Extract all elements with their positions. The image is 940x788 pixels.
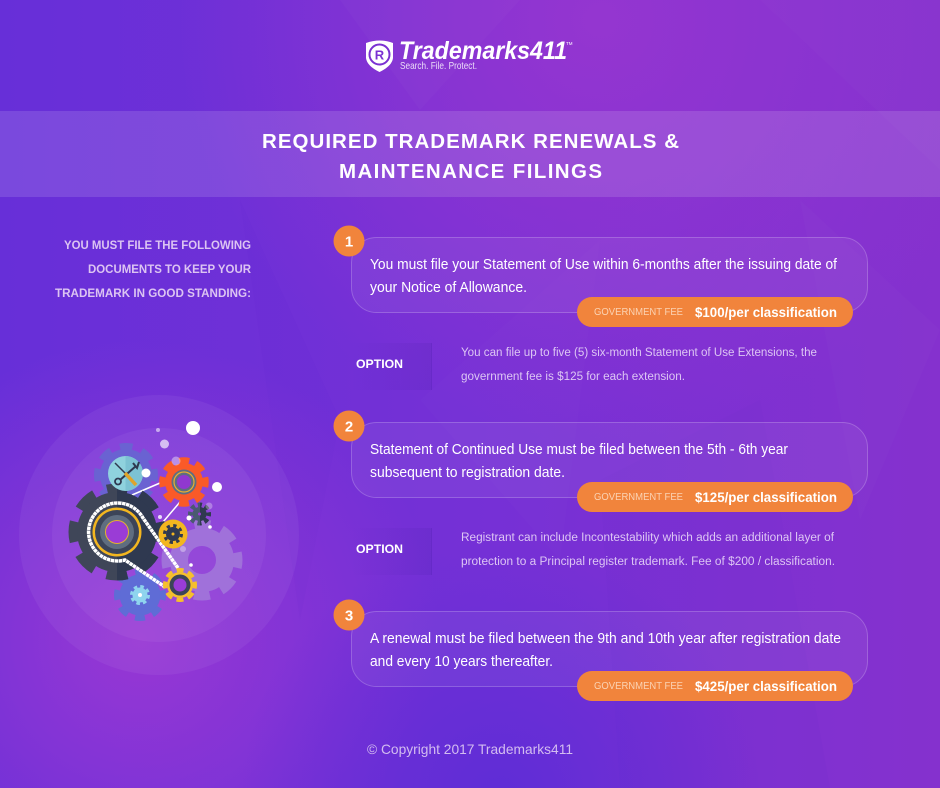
- logo wordmark: Trademarks411: [399, 37, 567, 65]
- step 3 text: [370, 631, 841, 670]
- icon: yellow dial: [158, 520, 188, 548]
- title: REQUIRED TRADEMARK RENEWALS &: [262, 130, 679, 153]
- option 2 text: Registrant can include Incontestability which adds an additional layer of: [461, 532, 835, 544]
- icon: orange gear: [162, 460, 206, 504]
- option 1 text: You can file up to five (5) six-month Statement of Use Extensions, the: [461, 347, 817, 359]
- step 3 text: A renewal must be filed between the 9th and 10th year after registration date: [370, 631, 841, 647]
- logo trademark sign: TM: [566, 41, 573, 46]
- step 3 fee pill: $425/per classification: [695, 678, 837, 694]
- step 3 fee pill: GOVERNMENT FEE: [594, 680, 683, 692]
- icon: blue gear top: [98, 446, 154, 504]
- icon: shield: R: [375, 48, 385, 62]
- intro text: DOCUMENTS TO KEEP YOUR: [88, 264, 252, 276]
- step 2 text: subsequent to registration date.: [370, 465, 565, 481]
- option 1 text: [461, 347, 817, 383]
- logo: [366, 37, 573, 72]
- option 2: [351, 528, 835, 575]
- icon: yellow gear: [165, 570, 195, 600]
- panel: step 1: [334, 226, 868, 327]
- icon: large dark gear: [73, 488, 161, 576]
- step 2 fee pill: [577, 482, 853, 512]
- step 1 text: You must file your Statement of Use within 6-months after the issuing date of: [370, 257, 838, 273]
- logo tagline: Search. File. Protect.: [400, 60, 477, 72]
- title: MAINTENANCE FILINGS: [339, 160, 602, 183]
- footer copyright: © Copyright 2017 Trademarks411: [367, 741, 573, 757]
- panel: step 2: [334, 410, 868, 512]
- step 3 badge: 3: [345, 608, 353, 624]
- step 2 fee pill: $125/per classification: [695, 489, 837, 505]
- step 2 text: [370, 442, 788, 481]
- step 1 fee pill: [577, 297, 853, 327]
- illustration: gears: [19, 395, 299, 675]
- step 1 text: [370, 257, 838, 296]
- connector lines: [132, 483, 180, 522]
- icon: blue gear bottom: [117, 572, 163, 618]
- step 2 badge: 2: [345, 418, 353, 436]
- icon: belt: [89, 503, 178, 587]
- icon: shield: [366, 40, 393, 72]
- step 1 badge: [334, 226, 364, 256]
- decorative dots: [142, 421, 222, 567]
- option 2 text: [461, 532, 835, 568]
- panel: step 3: [334, 600, 868, 701]
- title: [262, 130, 679, 183]
- intro text: YOU MUST FILE THE FOLLOWING: [64, 240, 251, 252]
- intro text: [55, 240, 252, 300]
- step 2 text: Statement of Continued Use must be filed between the 5th - 6th year: [370, 442, 788, 458]
- icon: pale purple gear: [166, 524, 238, 596]
- option 2 text: protection to a Principal register trademark. Fee of $200 / classification.: [461, 556, 835, 568]
- option 1 text: government fee is $125 for each extension.: [461, 371, 685, 383]
- step 1 badge: 1: [345, 234, 353, 250]
- step 1 text: your Notice of Allowance.: [370, 280, 527, 296]
- step 3 badge: [334, 600, 364, 630]
- icon: small dark gear: [190, 505, 208, 523]
- option 2 label: OPTION: [356, 544, 403, 556]
- step 2 fee pill: GOVERNMENT FEE: [594, 491, 683, 503]
- option 1 label: OPTION: [356, 359, 403, 371]
- intro text: TRADEMARK IN GOOD STANDING:: [55, 288, 251, 300]
- step 1 fee pill: GOVERNMENT FEE: [594, 306, 683, 318]
- step 2 badge: [334, 410, 364, 442]
- step 1 fee pill: $100/per classification: [695, 304, 837, 320]
- title band: [0, 111, 940, 197]
- icon: wrench and screwdriver badge: [108, 456, 143, 491]
- step 3 fee pill: [577, 671, 853, 701]
- option 1: [351, 343, 817, 390]
- step 3 text: and every 10 years thereafter.: [370, 654, 553, 670]
